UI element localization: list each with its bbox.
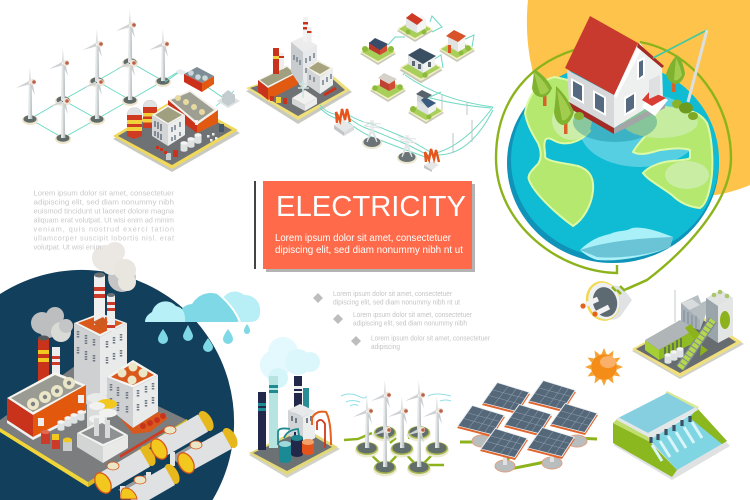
plant with smokestacks bottom-center: [249, 337, 340, 478]
storage tanks: [91, 408, 241, 500]
trees: [532, 55, 685, 134]
title panel: [254, 181, 475, 272]
left text block: [34, 188, 175, 252]
solar farm: [457, 380, 598, 472]
power plant top-center: [246, 17, 352, 124]
left text block: adipiscing elit, sed diam nonummy nibh: [34, 198, 174, 206]
power plant top-left: [113, 90, 240, 172]
bullet one: [313, 289, 460, 306]
left text block: euismod tincidunt ut laoreet dolore magna: [34, 206, 174, 216]
small front building: [107, 360, 168, 434]
pole and wire: [653, 30, 707, 120]
yellow background shape: [527, 0, 750, 197]
left text block: volutpat. Ut wisi enim.: [34, 242, 104, 252]
wind farm bottom-center: [341, 380, 451, 476]
wire ring around globe: [496, 42, 731, 289]
bullet two: adipiscing elit, sed diam nonummy nibh: [353, 318, 467, 328]
bullet three: adipiscing: [371, 342, 400, 351]
sun: [585, 348, 623, 386]
bullet two: Lorem ipsum dolor sit amet, consectetuer: [353, 310, 473, 319]
smoke clouds: [31, 242, 136, 342]
title panel: dipiscing elit, sed diam nonummy nibh nt ut: [275, 244, 463, 256]
wind farm top-left: [16, 10, 178, 144]
left text block: aliquam erat volutpat. Ut wisi enim ad minim: [34, 216, 174, 224]
title panel: Lorem ipsum dolor sit amet, consectetuer: [275, 232, 451, 244]
left text block: veniam, quis nostrud exerci tation: [34, 224, 174, 234]
bullet one: dipiscing elit, sed diam nonummy nibh nt ut: [333, 298, 460, 306]
rain clouds: [145, 292, 260, 352]
bullet list: [313, 289, 491, 351]
tall building: [74, 272, 127, 416]
houses: [360, 13, 475, 124]
dark circle background: [0, 270, 234, 500]
globe: [507, 62, 719, 263]
barrels: [41, 410, 84, 451]
title panel: ELECTRICITY: [276, 191, 466, 223]
house on globe: [565, 16, 668, 142]
substations and pylons: [334, 109, 439, 172]
bullet two: [333, 310, 473, 328]
cooling unit and transformer: [165, 67, 240, 108]
bullet one: Lorem ipsum dolor sit amet, consectetuer: [333, 289, 453, 298]
bullet three: [351, 334, 491, 351]
left text block: ullamcorper suscipit lobortis nisl. erat: [34, 234, 174, 242]
hydro dam: [613, 391, 730, 480]
transmission lines: [320, 16, 493, 158]
red building: [7, 336, 86, 440]
large factory in circle: [0, 242, 241, 500]
left text block: Lorem ipsum dolor sit amet, consectetuer: [34, 188, 175, 198]
bullet three: Lorem ipsum dolor sit amet, consectetuer: [371, 334, 491, 342]
treatment pool: [77, 393, 128, 463]
plug and cable: [580, 277, 647, 325]
green biofuel plant: [632, 290, 744, 379]
